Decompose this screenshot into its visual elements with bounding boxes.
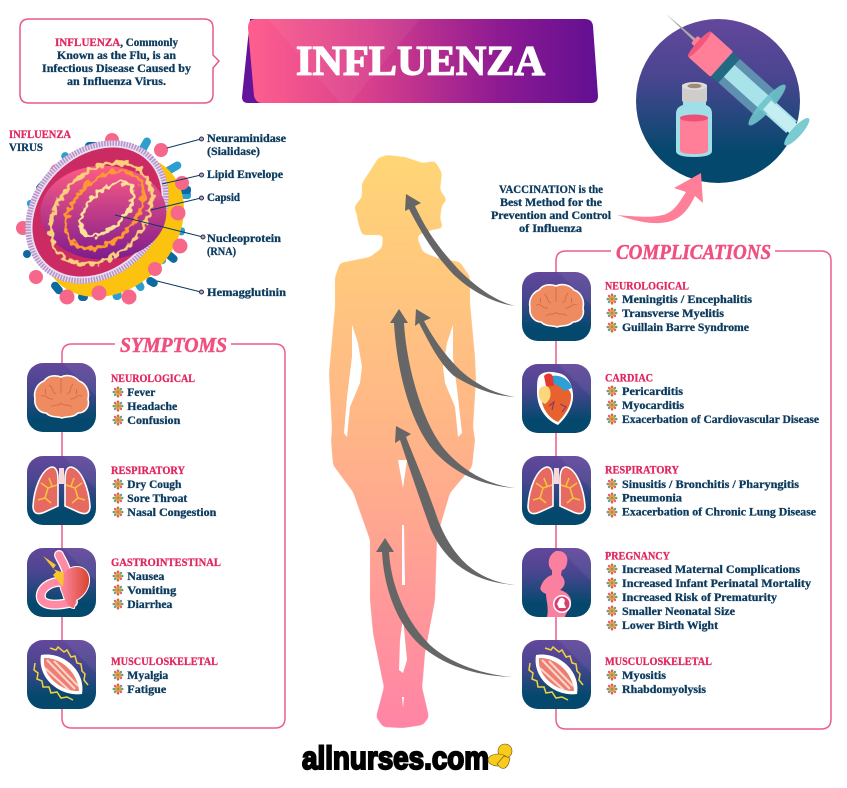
complication: respiratory: Pneumonia [622,492,682,504]
icon: heart [537,372,573,425]
symptom: neurological [27,363,195,432]
symptom: musculoskeletal: MUSCULOSKELETAL [111,656,218,668]
text: vaccination note: of Influenza [519,223,582,235]
symptom: respiratory: Dry Cough [127,479,182,491]
heading: complications: COMPLICATIONS [616,240,771,264]
icon: duck [488,744,512,768]
symptom: musculoskeletal: Fatigue [127,684,166,696]
arrow: vaccination to circle [617,173,703,223]
symptom: gastrointestinal [27,548,221,617]
virus heading: INFLUENZA [9,129,72,141]
complication: musculoskeletal [522,640,712,709]
arrow: pregnancy to abdomen [395,426,515,585]
complication: cardiac: Pericarditis [622,386,684,398]
virus part labels: (RNA) [207,246,236,258]
symptom: musculoskeletal [27,640,218,709]
text: vaccination note: VACCINATION is the [499,184,603,196]
complication: neurological: Meningitis / Encephalitis [622,294,753,306]
panel: complications [522,240,831,729]
complication: pregnancy: Increased Risk of Prematurity [622,592,777,604]
symptom: gastrointestinal: Nausea [127,571,165,583]
symptom: respiratory [27,456,217,525]
symptom: musculoskeletal: Myalgia [127,670,169,682]
text: vaccination note [491,184,611,235]
arrow: cardiac to chest [415,309,515,397]
callout: definition: INFLUENZA, Commonly [55,37,178,49]
complication: pregnancy: Lower Birth Wight [622,620,718,632]
callout: definition [20,19,219,103]
heading: symptoms: SYMPTOMS [120,333,227,357]
complication: cardiac [522,364,819,433]
symptom: gastrointestinal: GASTROINTESTINAL [111,557,221,569]
complication: respiratory: RESPIRATORY [605,464,680,476]
complication: neurological: Transverse Myelitis [622,308,725,320]
symptom: neurological: Fever [127,387,155,399]
symptom: gastrointestinal: Vomiting [127,585,177,597]
complication: pregnancy: Increased Infant Perinatal Mortality [622,578,811,590]
text: vaccination note: Prevention and Control [491,210,611,222]
complication: respiratory [522,456,816,525]
symptom: respiratory: RESPIRATORY [111,465,186,477]
symptom: neurological: Headache [127,401,177,413]
arrow: neurological to head [405,194,515,306]
virus part labels: (Sialidase) [207,146,260,158]
icon: vial [676,82,712,157]
text: vaccination note: Best Method for the [500,197,602,209]
virus part labels [207,133,287,299]
symptom: respiratory: Nasal Congestion [127,507,217,519]
virus part labels: Lipid Envelope [207,169,283,181]
arrow: musculoskeletal to legs [376,538,512,677]
symptom: gastrointestinal: Diarrhea [127,599,173,611]
complication: pregnancy [522,548,811,632]
body silhouette [329,155,476,728]
panel: symptoms [27,333,285,728]
complication: neurological [522,272,753,341]
complication: cardiac: Myocarditis [622,400,685,412]
title banner: INFLUENZA [296,39,546,85]
complication: pregnancy: Smaller Neonatal Size [622,606,735,618]
complication: respiratory: Exacerbation of Chronic Lung Disease [622,506,816,518]
complication: cardiac: Exacerbation of Cardiovascular Disease [622,414,819,426]
vaccine circle with syringe and vial [636,0,819,183]
complication: pregnancy: PREGNANCY [605,550,671,562]
virus part labels: Neuraminidase [207,133,286,145]
icon: pregnant silhouette [540,551,571,617]
virus part labels: Capsid [207,192,241,204]
complication: musculoskeletal: MUSCULOSKELETAL [605,656,712,668]
title banner [242,19,598,103]
leader lines [115,137,205,294]
complication: neurological: NEUROLOGICAL [605,280,689,292]
complication: pregnancy: Increased Maternal Complications [622,564,801,576]
complication: neurological: Guillain Barre Syndrome [622,322,749,334]
logo: allnurses.com: allnurses.com [302,740,489,776]
symptom: neurological: NEUROLOGICAL [111,373,195,385]
virus part labels: Nucleoprotein [207,233,282,245]
arrow: respiratory to chest [390,309,515,488]
callout: definition: Known as the Flu, is an [57,50,177,62]
callout: definition: Infectious Disease Caused by [42,63,191,75]
virus illustration [0,103,213,326]
callout: definition: an Influenza Virus. [67,76,166,88]
complication: musculoskeletal: Myositis [622,670,667,682]
complication: musculoskeletal: Rhabdomyolysis [622,684,707,696]
complication: respiratory: Sinusitis / Bronchitis / Pharyngitis [622,479,800,491]
virus part labels: Hemagglutinin [207,287,287,299]
virus heading [9,129,72,154]
symptom: neurological: Confusion [127,415,181,427]
icon: syringe [648,0,819,155]
symptom: respiratory: Sore Throat [127,493,187,505]
complication: cardiac: CARDIAC [605,372,653,384]
virus heading: VIRUS [9,142,43,154]
